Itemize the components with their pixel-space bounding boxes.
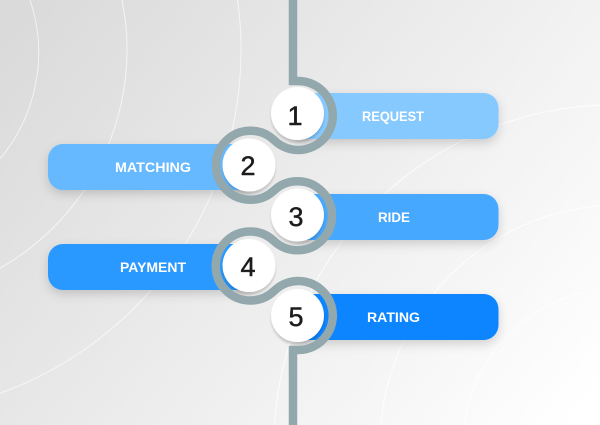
label: payment: PAYMENT (120, 260, 187, 275)
background arcs: top left (0, 0, 241, 393)
pill: ride (290, 194, 498, 240)
pill: rating (290, 294, 498, 340)
number circle 2 (222, 138, 276, 192)
number circle 1 (271, 87, 324, 140)
number circle 2: 2 (240, 151, 256, 181)
label: ride: RIDE (378, 210, 410, 225)
number circle 3: 3 (288, 202, 304, 232)
number circle 1: 1 (287, 101, 303, 131)
number circle 4: 4 (240, 252, 256, 282)
number circle 3 (271, 188, 324, 242)
number circle 5 (271, 289, 324, 342)
background arcs: bottom right (275, 105, 600, 425)
label: rating: RATING (367, 310, 420, 325)
number circle 5: 5 (288, 302, 304, 332)
number circle 4 (222, 239, 276, 292)
pill: request (290, 93, 498, 139)
label: request: REQUEST (362, 109, 425, 124)
winding connector line (216, 0, 333, 425)
label: matching: MATCHING (115, 160, 191, 175)
pill: payment (48, 244, 256, 290)
pill: matching (48, 144, 256, 190)
